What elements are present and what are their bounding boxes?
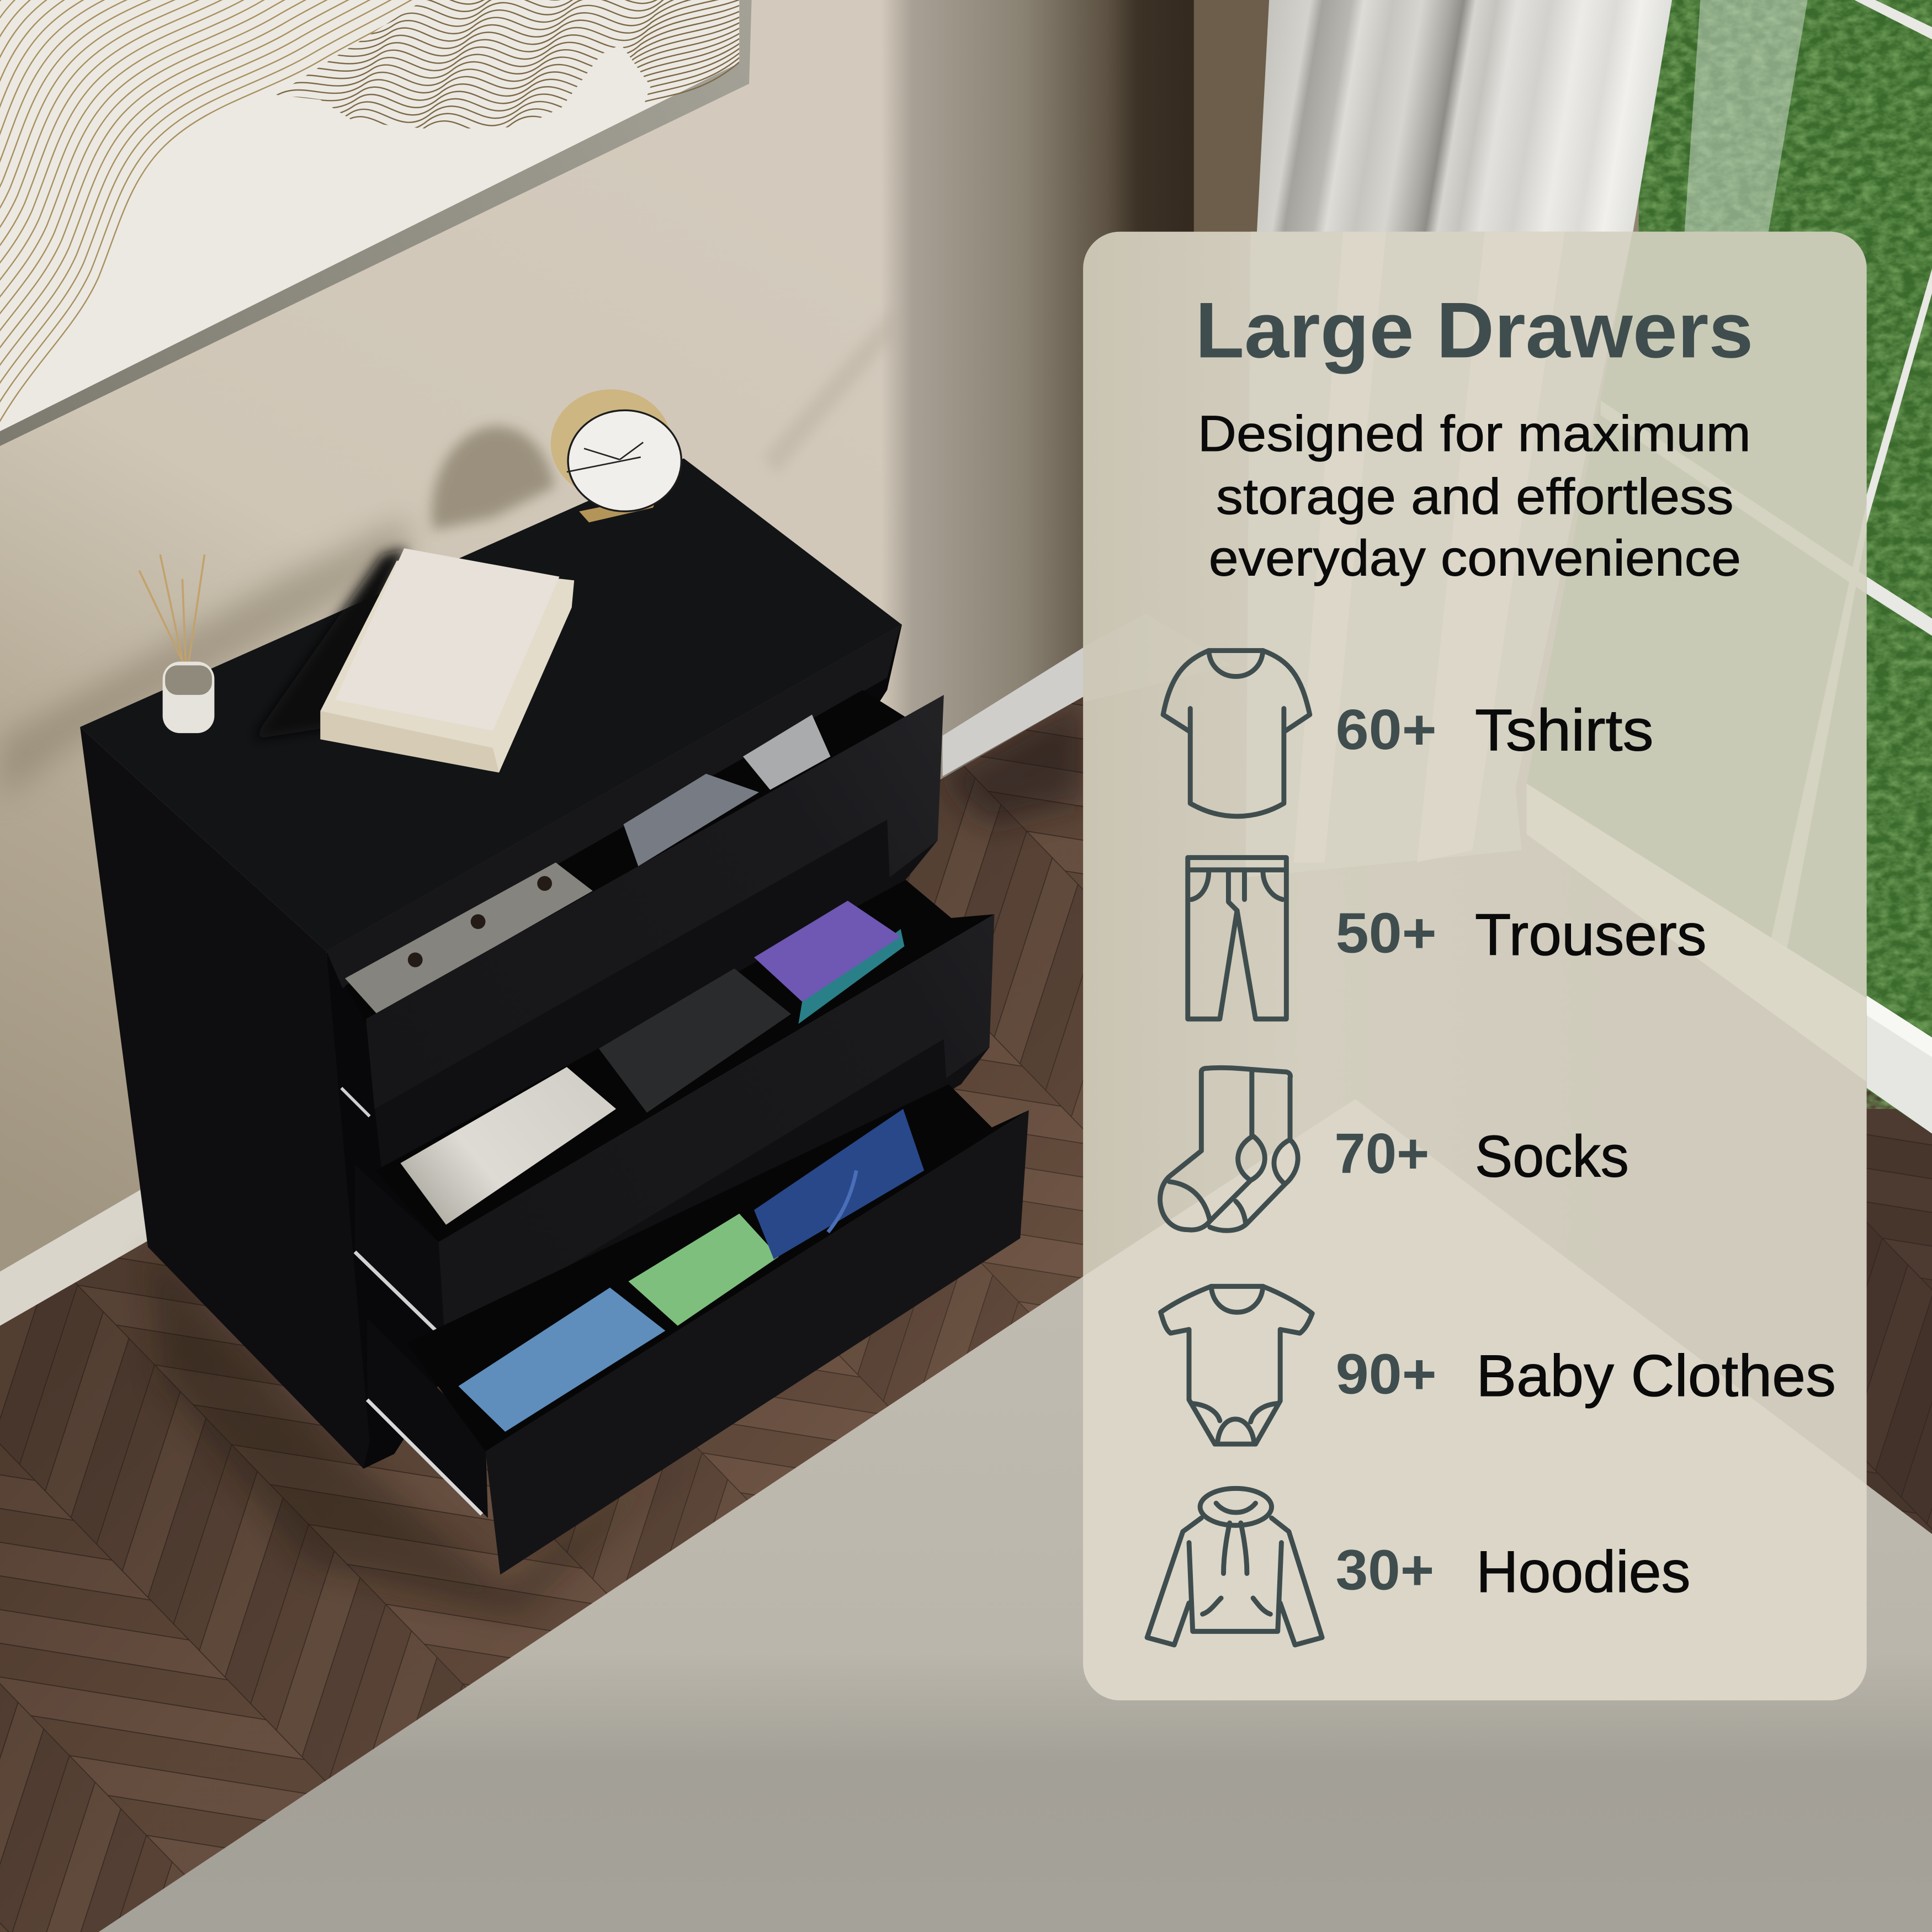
clothes: blue-grey	[623, 774, 759, 866]
count: 30+	[1336, 1538, 1434, 1601]
clock face	[568, 410, 681, 511]
label: Baby Clothes	[1476, 1342, 1836, 1409]
clothes: teal	[798, 929, 904, 1024]
row: socks	[1160, 1068, 1629, 1230]
clothes: light grey sock	[743, 715, 830, 790]
curtain seen through panel	[1246, 232, 1433, 877]
grass texture	[1639, 0, 1932, 1109]
icon: baby bodysuit	[1161, 1286, 1312, 1444]
middle drawer underside band	[445, 1039, 989, 1382]
floor shadow by right wall	[943, 696, 1084, 826]
panel background	[1083, 232, 1867, 1700]
clothes: white	[400, 1067, 616, 1225]
buttons	[408, 876, 552, 967]
bottom drawer front	[485, 1110, 1029, 1575]
icon: socks	[1160, 1068, 1298, 1230]
window grass	[1639, 0, 1932, 1134]
label: Tshirts	[1475, 697, 1654, 763]
baseboard left	[0, 1189, 148, 1326]
clothes: purple	[754, 901, 901, 1002]
diagonal wall shadow	[0, 518, 407, 801]
middle drawer	[355, 880, 994, 1382]
chest of drawers	[80, 458, 1029, 1575]
floor	[0, 542, 1932, 1932]
chest top book shadow	[253, 548, 407, 739]
book pages	[320, 711, 499, 773]
book stack	[320, 548, 574, 773]
middle drawer side	[355, 1164, 445, 1339]
count: 60+	[1336, 698, 1437, 761]
clothes: dark shirt	[599, 968, 791, 1113]
clock shadow on wall	[432, 426, 554, 530]
row: baby clothes	[1161, 1286, 1836, 1444]
middle drawer front	[439, 914, 994, 1341]
icon: t-shirt	[1163, 651, 1310, 816]
window light beam	[1684, 0, 1808, 234]
lower book	[320, 561, 574, 773]
floor right darker strip	[1867, 1072, 1932, 1546]
panel: large drawers	[1083, 232, 1867, 1700]
description: everyday convenience	[1209, 530, 1741, 586]
clothes: jeans	[458, 1288, 665, 1432]
upper book	[335, 548, 559, 731]
curtain	[1257, 0, 1672, 234]
hoodie string	[828, 1171, 856, 1232]
description: Designed for maximum	[1198, 406, 1751, 462]
rail	[367, 1400, 482, 1514]
floor shadow under chest	[148, 1247, 690, 1614]
window sill seen through panel	[1527, 784, 1867, 1082]
icon: trousers	[1188, 858, 1286, 1019]
row: tshirts	[1163, 651, 1654, 816]
clothes: green	[628, 1214, 779, 1326]
faint baseboard	[1083, 614, 1232, 702]
rug	[99, 1099, 1932, 1932]
reed diffuser	[139, 554, 214, 733]
top rail	[327, 625, 902, 988]
top drawer underside band	[375, 819, 938, 1173]
rail	[341, 1088, 370, 1116]
row: trousers	[1188, 858, 1707, 1019]
painting contour lines: left	[0, 0, 413, 422]
rug seen through panel	[1083, 1099, 1867, 1700]
bottle	[163, 662, 214, 733]
window seen through panel	[1633, 232, 1867, 996]
count: 70+	[1334, 1122, 1429, 1185]
clock base	[579, 495, 658, 522]
baseboard right	[943, 647, 1084, 776]
count: 90+	[1336, 1342, 1437, 1406]
top drawer	[341, 690, 944, 1173]
chest carcass	[327, 625, 902, 1469]
reeds	[139, 554, 205, 672]
top drawer interior	[345, 690, 944, 1023]
clothes: blue hoodie	[754, 1109, 924, 1259]
window sill	[1867, 996, 1932, 1134]
label: Socks	[1475, 1123, 1629, 1190]
top drawer front	[366, 695, 944, 1109]
window frame	[1854, 0, 1932, 636]
description	[1198, 406, 1751, 586]
description: storage and effortless	[1216, 469, 1734, 525]
clock hands	[567, 442, 643, 472]
icon: hoodie	[1147, 1488, 1322, 1645]
painting contour lines: right	[276, 0, 740, 129]
wall	[0, 0, 1280, 1331]
chest top	[80, 458, 902, 951]
rail	[355, 1252, 439, 1333]
label: Hoodies	[1476, 1538, 1690, 1605]
clothes: grey knit	[345, 862, 593, 1014]
shelf glint	[468, 1137, 620, 1228]
clock rim	[551, 389, 672, 498]
chest side panel	[80, 727, 370, 1469]
label: Trousers	[1475, 901, 1707, 968]
bottom drawer	[367, 1084, 1029, 1575]
desk clock	[551, 389, 681, 522]
floor tone	[0, 696, 1084, 1932]
title: Large Drawers	[1195, 286, 1753, 374]
count: 50+	[1336, 901, 1437, 964]
bottom drawer interior	[407, 1084, 1029, 1451]
middle drawer interior	[376, 880, 994, 1242]
wall painting	[0, 0, 752, 446]
window mullion seen through panel	[1601, 400, 1867, 594]
bottom drawer side	[367, 1318, 488, 1518]
row: hoodies	[1147, 1488, 1690, 1645]
